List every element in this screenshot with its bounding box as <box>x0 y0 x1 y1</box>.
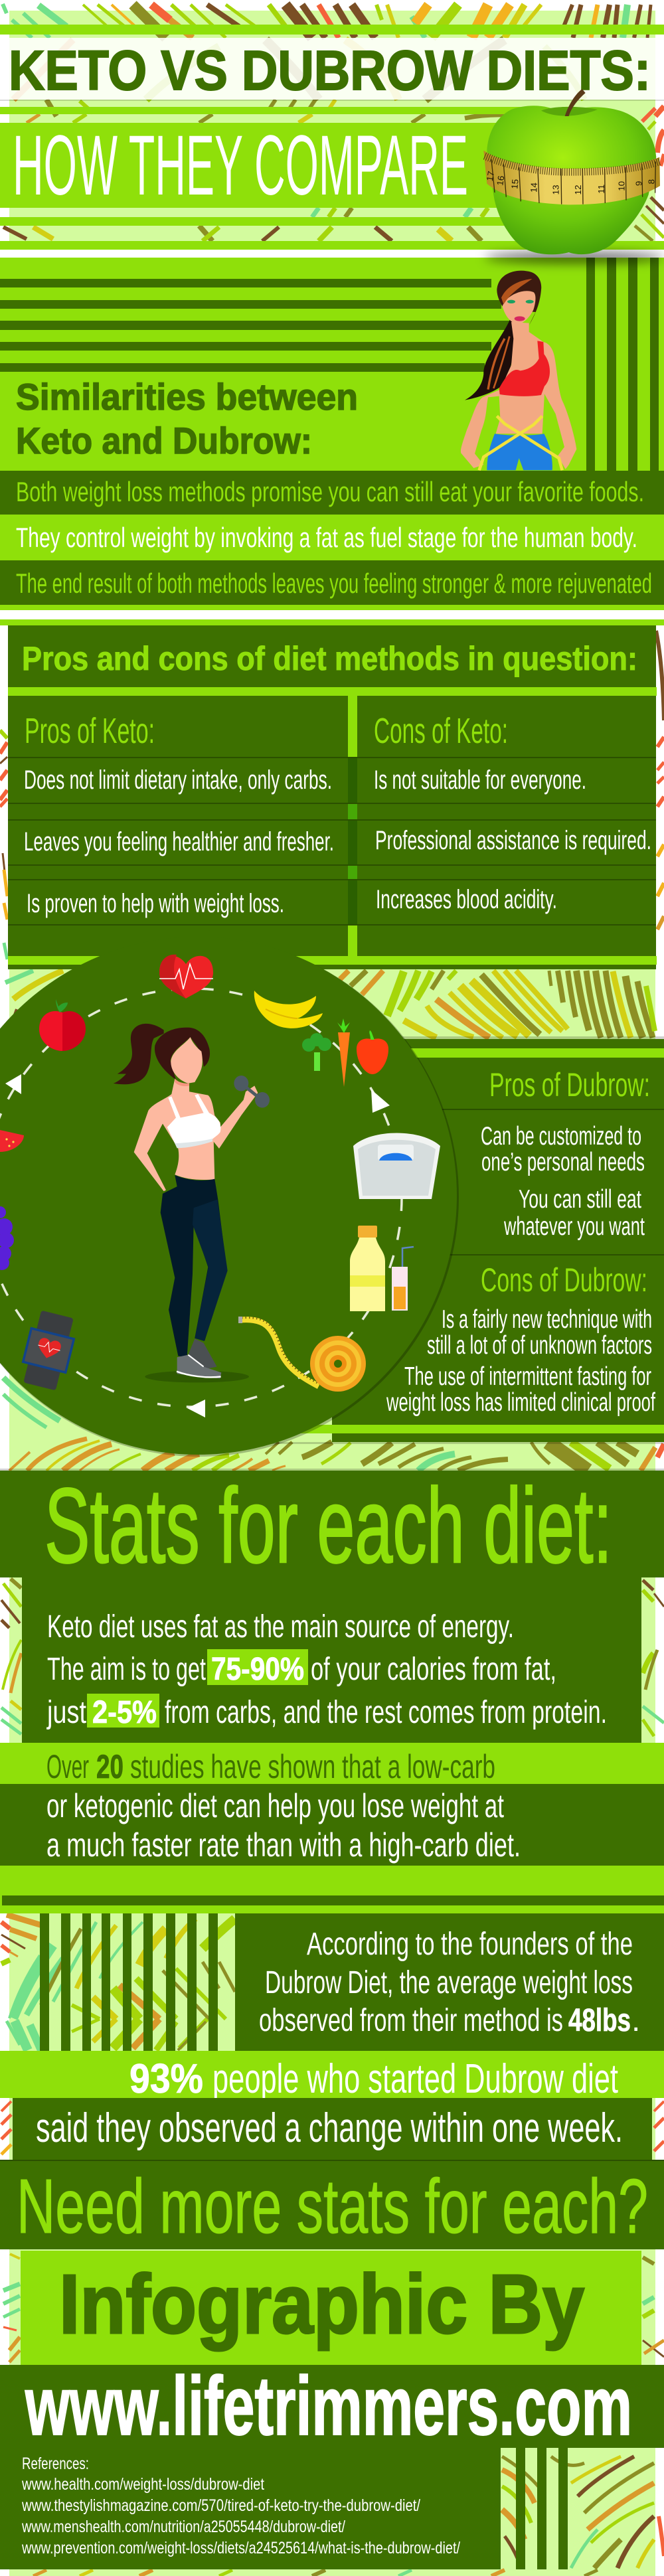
section heading: Similarities between <box>16 376 358 418</box>
band: similarity two <box>0 515 664 560</box>
column: cons of keto: Cons of Keto: <box>374 711 508 751</box>
panel: dubrow average weight loss <box>235 1913 664 2051</box>
cons of dubrow text <box>386 1261 655 1417</box>
header panel <box>0 25 664 258</box>
panel: similarities <box>0 252 664 471</box>
highlight: 75-90%: 75-90% <box>211 1652 304 1687</box>
arrow: bottom <box>187 1400 205 1417</box>
pros of dubrow text <box>481 1066 650 1241</box>
panel: dubrow average weight loss: 48lbs <box>568 2003 631 2038</box>
panel: keto stats: The aim is to get <box>47 1652 206 1687</box>
illustration: green apple with measuring tape: 8 <box>646 179 656 184</box>
illustration: green apple with measuring tape: 17 <box>485 171 496 182</box>
column: pros of keto: Leaves you feeling healthier and fresher. <box>24 827 334 856</box>
arrow: right <box>371 1089 390 1113</box>
panel: references: www.prevention.com/weight-loss/diets/a24525614/what-is-the-dubrow-diet/ <box>21 2539 460 2557</box>
panel: references: www.health.com/weight-loss/dubrow-diet <box>21 2475 264 2494</box>
section heading: Keto and Dubrow: <box>16 420 312 461</box>
panel: references: References: <box>22 2455 89 2473</box>
icon: banana <box>254 991 323 1028</box>
icon: vegetables <box>302 1018 388 1087</box>
panel: studies stat <box>0 1743 664 1913</box>
column: pros of keto: Is proven to help with weight loss. <box>27 889 284 918</box>
icon: bottle and juice <box>350 1226 414 1311</box>
panel: dubrow average weight loss: . <box>631 2003 640 2038</box>
panel: keto stats: of your calories from fat, <box>311 1652 556 1687</box>
panel: references <box>0 2448 501 2569</box>
icon: smart watch <box>18 1309 79 1392</box>
column: pros of keto: Does not limit dietary intake, only carbs. <box>24 765 332 795</box>
column: pros of keto: Pros of Keto: <box>25 711 155 751</box>
panel: studies stat: Over <box>46 1748 89 1785</box>
highlight: 2-5%: 2-5% <box>92 1695 157 1730</box>
icon: grapes <box>0 1206 14 1270</box>
panel: 93 percent stat: 93% <box>129 2056 203 2102</box>
illustration: woman with dumbbell <box>114 1024 270 1382</box>
illustration: green apple with measuring tape: 10 <box>617 181 627 191</box>
panel: keto stats: just <box>46 1695 86 1730</box>
illustration: green apple with measuring tape: 11 <box>596 185 606 194</box>
illustration: green apple with measuring tape: 16 <box>495 175 506 186</box>
arrow: left <box>5 1074 21 1094</box>
panel: 93 percent stat <box>0 2051 664 2160</box>
panel: pros and cons of keto <box>8 625 657 969</box>
panel: keto stats <box>22 1577 641 1743</box>
decorative stripe block <box>40 1913 218 2051</box>
illustration: green apple with measuring tape: 15 <box>509 179 521 189</box>
icon: heart <box>159 955 213 999</box>
band: similarity three <box>0 560 664 605</box>
band: similarity one <box>0 471 664 515</box>
icon: apple <box>39 999 86 1051</box>
panel: studies stat: studies have shown that a low-carb <box>130 1748 495 1785</box>
illustration: green apple with measuring tape <box>483 89 660 254</box>
panel: references: www.menshealth.com/nutrition/a25055448/dubrow-diet/ <box>21 2518 345 2536</box>
column: cons of keto: Increases blood acidity. <box>376 885 557 914</box>
panel: studies stat: 20 <box>96 1748 124 1785</box>
panel: lifestyle circle <box>0 937 459 1457</box>
illustration: green apple with measuring tape: 13 <box>551 185 561 195</box>
icon: scale <box>353 1133 440 1199</box>
icon: measuring tape <box>238 1317 366 1392</box>
apple shadow <box>485 252 664 264</box>
illustration: woman with tape <box>461 271 576 470</box>
column: cons of keto <box>374 711 651 914</box>
panel: pros and cons of dubrow <box>266 1036 664 1444</box>
icon: watermelon <box>0 1130 24 1152</box>
illustration: green apple with measuring tape: 14 <box>529 182 539 193</box>
column: pros of keto <box>24 711 334 918</box>
illustration: green apple with measuring tape: 9 <box>634 181 644 186</box>
panel: references: www.thestylishmagazine.com/570/tired-of-keto-try-the-dubrow-diet/ <box>21 2496 420 2515</box>
panel: infographic by: Infographic By <box>59 2257 584 2351</box>
illustration: green apple with measuring tape: 12 <box>573 185 583 195</box>
